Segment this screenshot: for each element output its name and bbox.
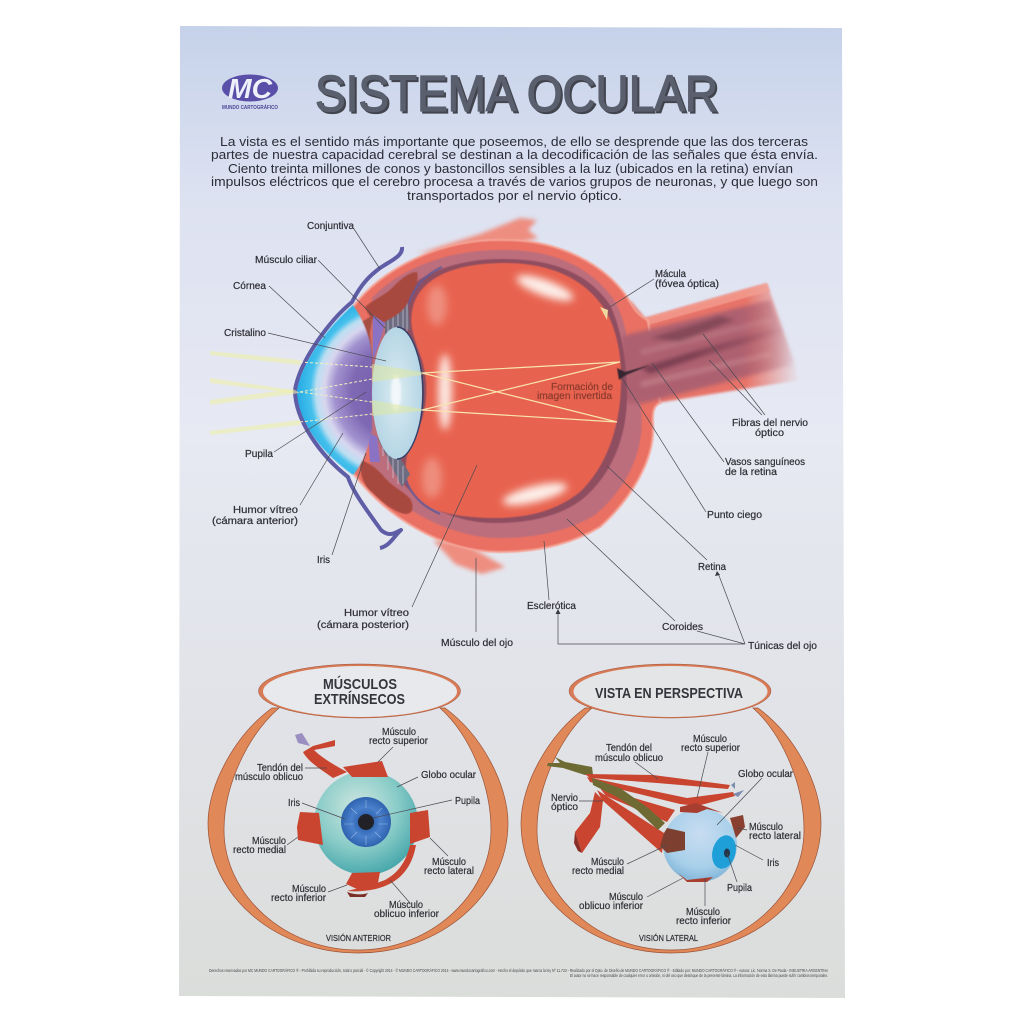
label: Iris — [317, 453, 366, 566]
panel: vista en perspectiva — [521, 664, 821, 953]
label: Músculo ciliar — [255, 255, 385, 328]
label: Músculo del ojo — [441, 558, 513, 649]
label: Pupila — [373, 796, 480, 818]
choroid — [370, 250, 642, 538]
intro text block: impulsos eléctricos que el cerebro procesa a través de varios grupos de neuronas, y que luego son — [211, 174, 818, 189]
heading oval right — [569, 664, 771, 718]
label: Músculo recto superior: recto superior — [681, 743, 741, 754]
label: Músculo recto inferior: recto inferior — [271, 893, 327, 904]
poster sheet background — [179, 26, 845, 998]
title: SISTEMA OCULAR — [315, 65, 718, 122]
label: Músculo recto medial: recto medial — [233, 845, 286, 856]
label: Iris: Iris — [317, 555, 330, 566]
label: Tendón del músculo oblicuo — [235, 763, 327, 783]
label: Cristalino: Cristalino — [224, 328, 266, 339]
extrinsic muscle tails — [417, 218, 538, 574]
heading oval left — [258, 664, 460, 718]
label: Humor vítreo (cámara anterior): (cámara anterior) — [212, 516, 298, 527]
heading oval left: MÚSCULOS — [323, 675, 397, 693]
label: Pupila: Pupila — [455, 796, 480, 807]
label: Nervio óptico — [551, 793, 603, 813]
label: Músculo recto medial: Músculo — [591, 857, 624, 868]
label: Músculo recto lateral — [737, 822, 801, 842]
label: Nervio óptico: óptico — [551, 802, 578, 813]
label: Músculo oblicuo inferior: Músculo — [609, 892, 643, 903]
label: Tendón del músculo oblicuo: Tendón del — [257, 763, 303, 774]
ring frame right — [521, 708, 821, 953]
footer credits — [209, 967, 828, 978]
main eye cross-section diagram — [210, 218, 800, 574]
title: SISTEMA OCULAR — [317, 67, 720, 124]
optic nerve fibres — [620, 300, 796, 404]
light rays — [210, 351, 620, 435]
label: Músculo recto lateral: Músculo — [749, 822, 783, 833]
label: Fibras del nervio óptico: Fibras del nervio — [732, 418, 808, 429]
label: Humor vítreo (cámara posterior): (cámara posterior) — [317, 620, 409, 631]
eyeball lateral view — [663, 808, 737, 882]
intro text block: La vista es el sentido más importante que poseemos, de ello se desprende que las dos terceras — [220, 134, 809, 149]
label: Músculo recto inferior: Músculo — [292, 884, 326, 895]
label: Globo ocular — [397, 770, 477, 787]
label: Músculo recto lateral: recto lateral — [424, 866, 474, 877]
label: Globo ocular: Globo ocular — [738, 769, 794, 780]
intro text block — [211, 134, 818, 203]
heading oval left: EXTRÍNSECOS — [314, 691, 405, 708]
footer credits: El autor no se hace responsable de cualquier error u omisión, ni del uso que destinque de la presente lámina. La información de esta lámina puede sufrir cambios temporales. — [570, 973, 828, 978]
intro text block: transportados por el nervio óptico. — [407, 188, 622, 203]
label: Córnea — [233, 281, 325, 338]
label: Músculo oblicuo inferior: oblicuo inferior — [579, 901, 644, 912]
label: Humor vítreo (cámara anterior): Humor vítreo — [233, 505, 298, 516]
label: Fibras del nervio óptico: óptico — [755, 428, 784, 439]
caption: visión anterior: VISIÓN ANTERIOR — [326, 934, 391, 943]
label: Humor vítreo (cámara anterior) — [212, 433, 343, 527]
caption: visión lateral: VISIÓN LATERAL — [639, 934, 698, 943]
label: Conjuntiva: Conjuntiva — [307, 221, 354, 232]
label: Tendón del músculo oblicuo — [595, 743, 663, 779]
label: Músculo recto medial: recto medial — [572, 866, 624, 877]
footer credits: Derechos reservados por MC MUNDO CARTOGRÁFICO ® - Prohibida su reproducción, total o parcial - © Copyright 2014 - © MUNDO CARTOGRÁFICO 2014 - www.mundocartografico.com - Hecho el depósito que marca la ley Nº 11.723 - Realizado por el Dpto. de Diseño de MUNDO CARTOGRÁFICO ® - Editado por: MUNDO CARTOGRÁFICO ® - Autora: Lic. Norma S. De Paola - INDUSTRIA ARGENTINA — [209, 967, 828, 973]
label: Coroides: Coroides — [662, 622, 703, 633]
label: Mácula (fóvea óptica): Mácula — [655, 269, 686, 280]
ring frame left — [208, 708, 508, 953]
vitreous highlights — [422, 270, 576, 510]
logo: MC Mundo Cartográfico: MC — [228, 73, 273, 104]
label: Mácula (fóvea óptica): (fóvea óptica) — [655, 279, 719, 290]
label: Coroides — [567, 519, 703, 633]
label: Tendón del músculo oblicuo: músculo oblicuo — [235, 772, 303, 783]
label: Músculo recto superior: Músculo — [693, 734, 727, 745]
label: Punto ciego: Punto ciego — [707, 510, 762, 521]
label: Músculo oblicuo inferior — [579, 878, 683, 912]
label: Cristalino — [224, 328, 386, 361]
label: Músculo recto medial — [233, 836, 298, 856]
label: Iris — [288, 798, 345, 819]
label: Iris — [735, 845, 779, 869]
label: Formación de imagen invertida: Formación de — [551, 382, 613, 393]
label: Tendón del músculo oblicuo: músculo oblicuo — [595, 753, 663, 764]
label: Mácula (fóvea óptica) — [610, 269, 719, 307]
retina — [395, 259, 627, 523]
label: Esclerótica — [527, 541, 576, 612]
label: Músculo recto inferior: recto inferior — [676, 916, 732, 927]
label: Fibras del nervio óptico — [703, 334, 808, 439]
label: Músculo oblicuo inferior — [374, 880, 440, 920]
label: Iris: Iris — [767, 858, 779, 869]
extrinsic muscles anterior view — [295, 733, 430, 897]
label: Músculo recto medial — [572, 845, 667, 877]
label: Esclerótica: Esclerótica — [527, 601, 576, 612]
label: Vasos sanguíneos de la retina: de la retina — [725, 467, 777, 478]
label: Punto ciego — [622, 378, 762, 521]
label: Vasos sanguíneos de la retina — [652, 363, 805, 478]
label: Pupila — [727, 853, 752, 894]
iris — [357, 315, 373, 460]
sclera — [353, 240, 660, 552]
label: Músculo oblicuo inferior: oblicuo inferior — [374, 909, 440, 920]
label: Músculo recto lateral: recto lateral — [749, 831, 801, 842]
zonule fibres — [377, 302, 410, 487]
conjunctiva — [295, 247, 402, 548]
label: Músculo recto lateral — [424, 838, 474, 877]
label: Músculo recto inferior — [271, 884, 347, 904]
label: Túnicas del ojo with arrows — [556, 571, 817, 652]
label: Músculo recto superior — [681, 734, 741, 798]
label: Conjuntiva — [307, 221, 380, 269]
label: Músculo recto medial: Músculo — [252, 836, 286, 847]
panel: músculos extrínsecos — [208, 664, 508, 953]
label: Túnicas del ojo with arrows: Túnicas del ojo — [748, 641, 817, 652]
label: Retina — [607, 466, 726, 573]
label: Músculo recto lateral: Músculo — [432, 857, 466, 868]
label: Retina: Retina — [698, 562, 726, 573]
cornea and anterior chamber — [296, 305, 372, 475]
label: Córnea: Córnea — [233, 281, 266, 292]
blind spot — [617, 365, 650, 380]
vitreous body — [406, 263, 621, 518]
eyeball anterior view — [314, 771, 418, 875]
logo: MC Mundo Cartográfico — [222, 73, 278, 111]
label: Humor vítreo (cámara posterior) — [317, 465, 477, 631]
label: Humor vítreo (cámara posterior): Humor vítreo — [344, 608, 409, 619]
label: Músculo recto inferior: Músculo — [686, 907, 720, 918]
label: Músculo recto superior — [369, 727, 429, 762]
label: Formación de imagen invertida — [537, 382, 613, 402]
heading oval right: VISTA EN PERSPECTIVA — [595, 685, 743, 702]
intro text block: partes de nuestra capacidad cerebral se destinan a la decodificación de las señales que ésta envía. — [211, 147, 818, 162]
ciliary muscle — [360, 272, 418, 514]
label: Pupila — [245, 392, 366, 460]
label: Tendón del músculo oblicuo: Tendón del — [606, 743, 652, 754]
label: Músculo recto inferior — [676, 878, 732, 927]
logo: MC Mundo Cartográfico: MUNDO CARTOGRÁFICO — [222, 104, 278, 111]
optic nerve sheath — [630, 283, 800, 420]
label: Músculo recto superior: Músculo — [382, 727, 416, 738]
label: Músculo ciliar: Músculo ciliar — [255, 255, 318, 266]
macula marker — [600, 307, 608, 320]
intro text block: Ciento treinta millones de conos y bastoncillos sensibles a la luz (ubicados en la retina) envían — [228, 161, 793, 176]
label: Pupila: Pupila — [245, 449, 273, 460]
label: Iris: Iris — [288, 798, 300, 809]
label: Músculo recto superior: recto superior — [369, 736, 429, 747]
label: Nervio óptico: Nervio — [551, 793, 578, 804]
label: Vasos sanguíneos de la retina: Vasos sanguíneos — [725, 457, 805, 468]
crystalline lens — [372, 327, 423, 459]
label: Formación de imagen invertida: imagen invertida — [537, 391, 612, 402]
label: Pupila: Pupila — [727, 883, 752, 894]
label: Músculo del ojo: Músculo del ojo — [441, 638, 513, 649]
retina front edge — [405, 267, 442, 514]
label: Músculo oblicuo inferior: Músculo — [389, 900, 423, 911]
label: Globo ocular — [717, 769, 794, 825]
muscles and optic nerve lateral view — [547, 757, 745, 882]
label: Globo ocular: Globo ocular — [421, 770, 477, 781]
